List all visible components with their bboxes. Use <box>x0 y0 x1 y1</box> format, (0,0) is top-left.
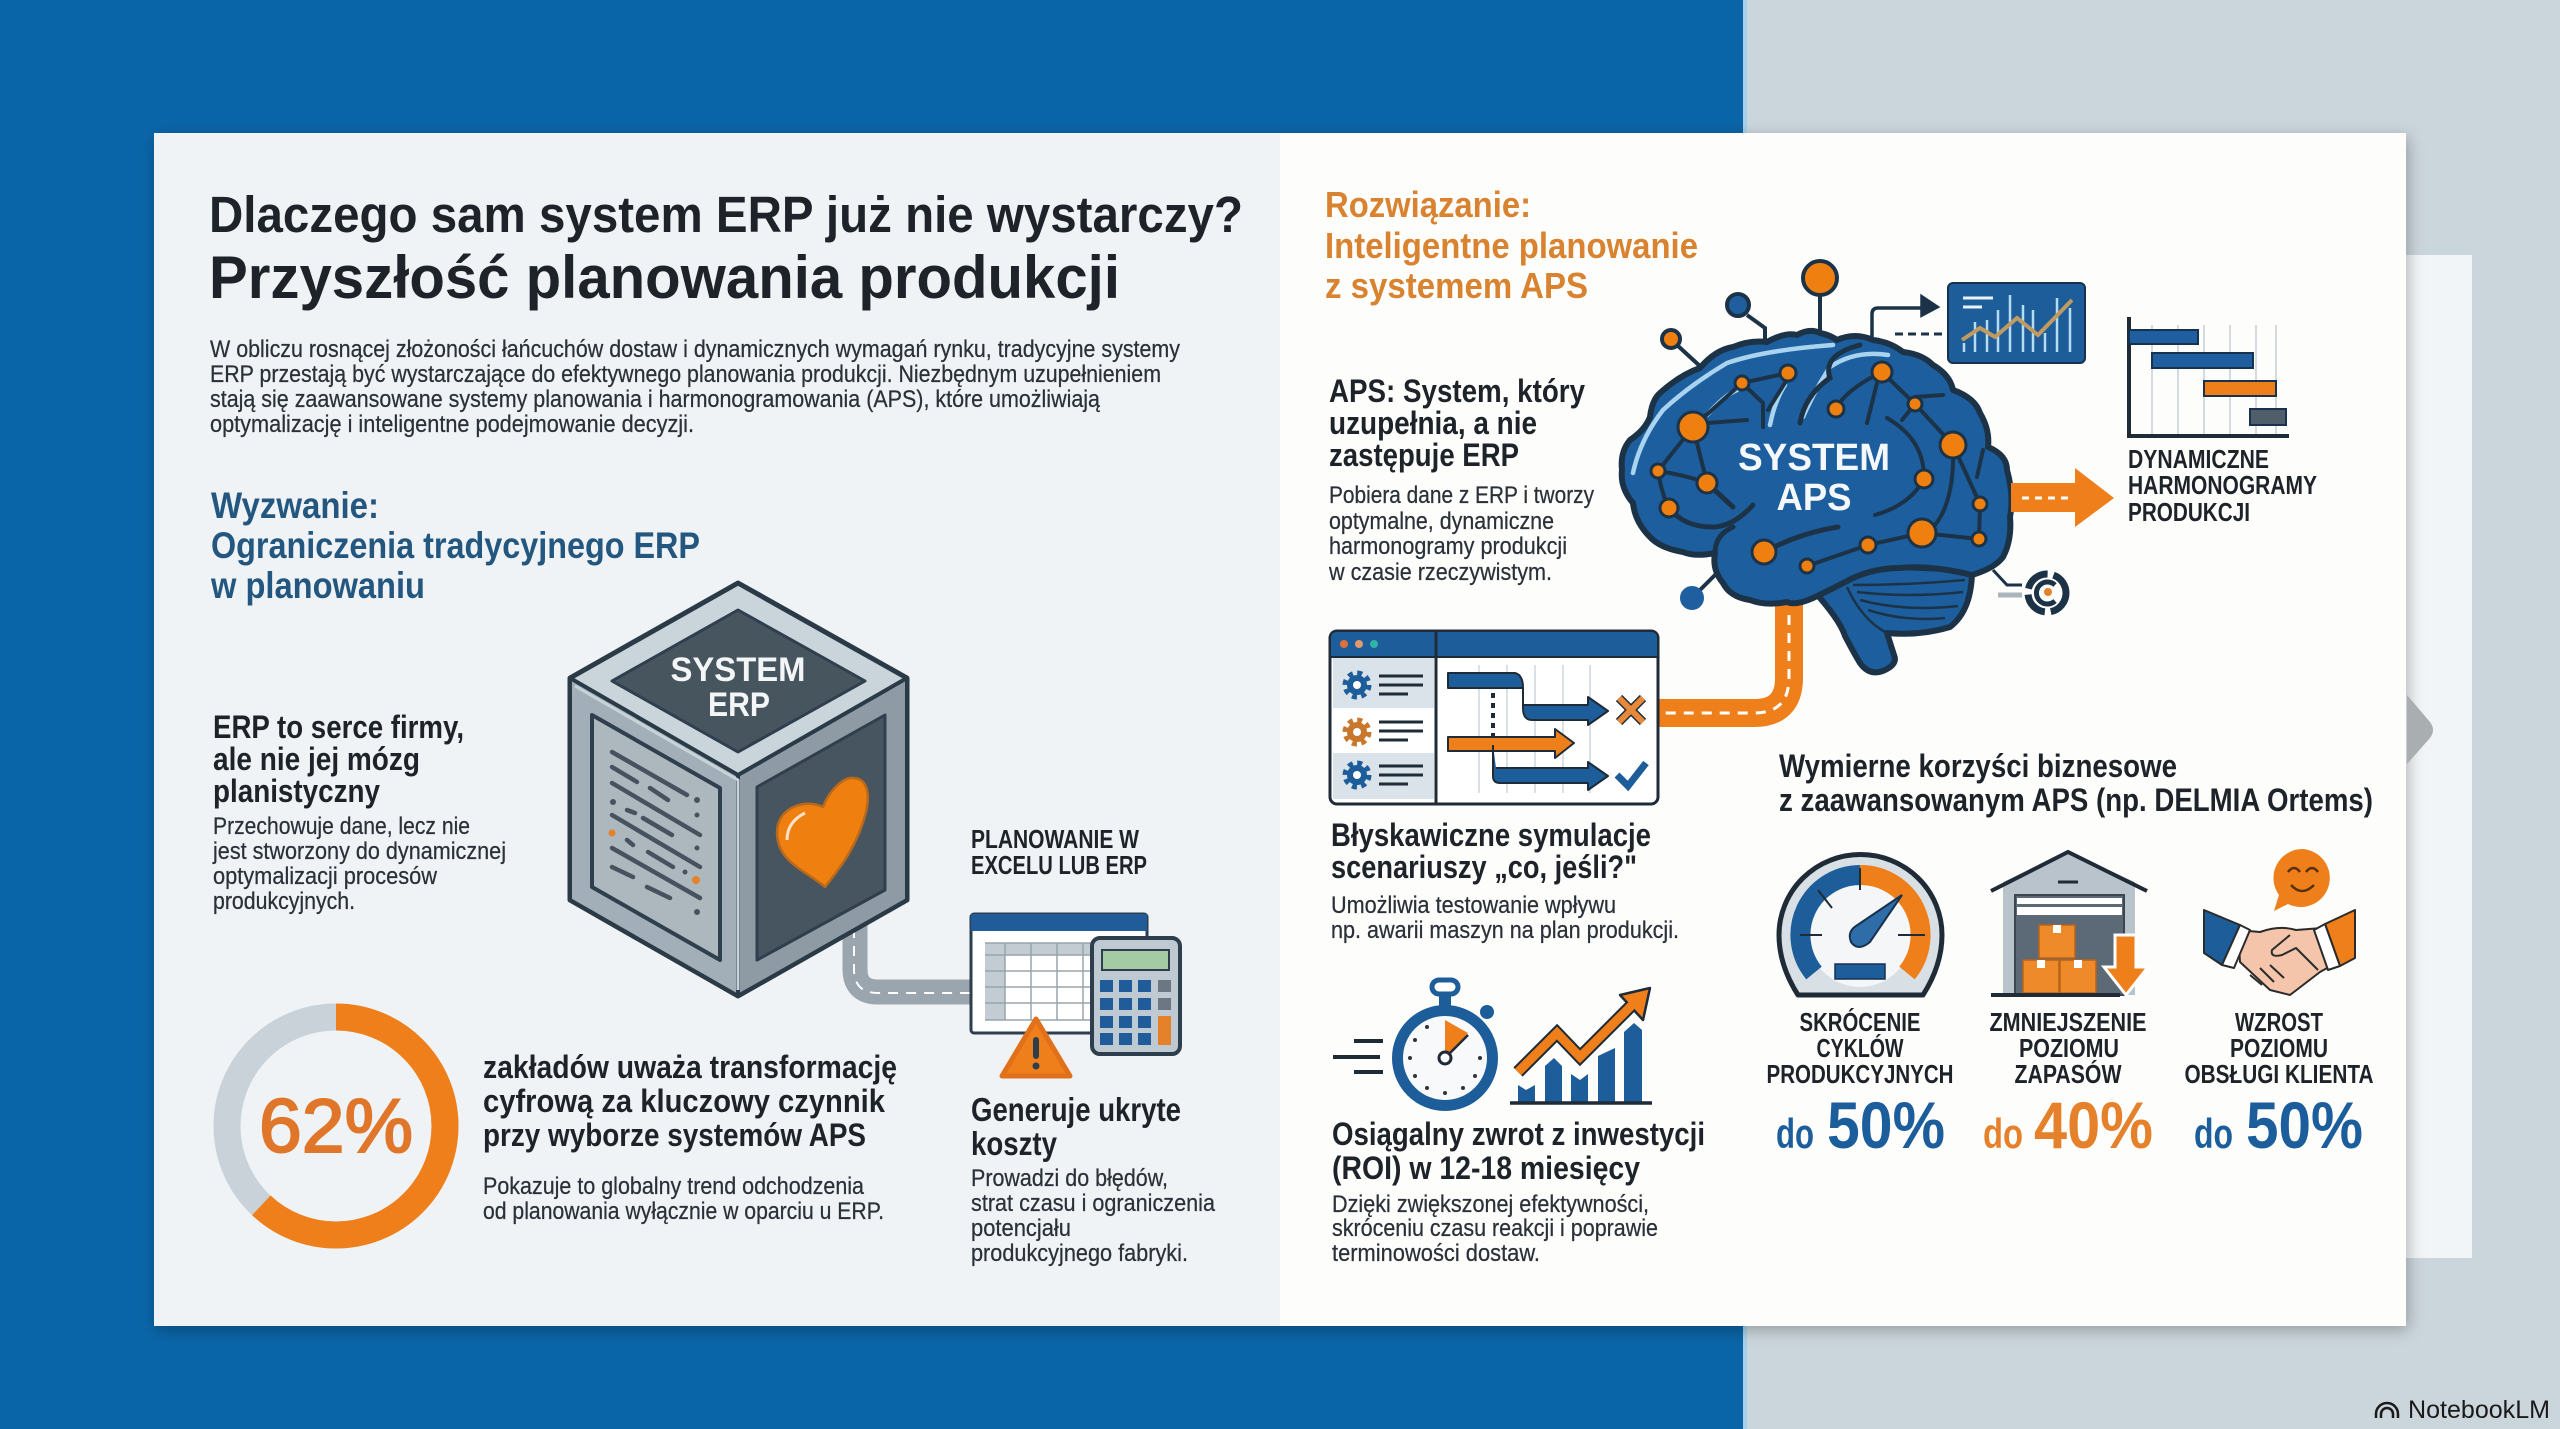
heading: korzyści <box>1779 748 2373 818</box>
heading: korzyści: Wymierne korzyści biznesowe <box>1779 748 2177 784</box>
icon: simulation window <box>1330 631 1658 804</box>
brain orange nodes <box>1651 362 1987 573</box>
text: ROI: Dzięki zwiększonej efektywności, <box>1332 1191 1649 1218</box>
label: dynamiczne harmonogramy: HARMONOGRAMY <box>2128 470 2317 500</box>
brain highlights <box>1633 345 1888 473</box>
donut chart 62%: 62% <box>259 1084 413 1169</box>
heading: Rozwiązanie: z systemem APS <box>1325 265 1588 306</box>
benefit: zapasy: do <box>1983 1110 2023 1157</box>
text: ROI: Osiągalny zwrot z inwestycji <box>1332 1116 1705 1152</box>
icon: speedometer <box>1779 855 1942 995</box>
text: symulacje: np. awarii maszyn na plan produkcji. <box>1331 917 1679 944</box>
cube label: ERP <box>708 686 770 724</box>
text: ROI: skróceniu czasu reakcji i poprawie <box>1332 1215 1658 1242</box>
icon: ERP cube <box>570 583 907 996</box>
text: zakładów statistic: od planowania wyłącznie w oparciu u ERP. <box>483 1198 884 1225</box>
page-turn arrow <box>2407 695 2433 764</box>
text: ERP to serce firmy: ERP to serce firmy, <box>213 709 464 745</box>
cube label: SYSTEM <box>670 651 806 689</box>
text: ERP to serce firmy: produkcyjnych. <box>213 888 355 915</box>
connector: orange pipe from simulation to brain <box>1655 590 1789 713</box>
intro paragraph: stają się zaawansowane systemy planowania i harmonogramowania (APS), które umożliwiają <box>210 386 1101 413</box>
benefit: skrócenie cykli: do <box>1776 1110 1814 1157</box>
icon: spreadsheet <box>971 914 1147 1033</box>
heading: korzyści: z zaawansowanym APS (np. DELMIA Ortems) <box>1779 782 2373 818</box>
benefit: obsługa klienta: do <box>2194 1110 2233 1157</box>
text: Generuje ukryte koszty: potencjału <box>971 1215 1071 1242</box>
intro paragraph: W obliczu rosnącej złożoności łańcuchów dostaw i dynamicznych wymagań rynku, tradycyjne systemy <box>210 336 1180 363</box>
benefit: zapasy: 40% <box>2034 1088 2153 1162</box>
label and value: PRODUKCYJNYCH <box>1766 1059 1954 1089</box>
NotebookLM watermark: NotebookLM <box>2408 1396 2550 1424</box>
label and value: CYKLÓW <box>1816 1033 1904 1063</box>
text: zakładów statistic: zakładów uważa transformację <box>483 1049 897 1085</box>
label: planowanie w excelu: EXCELU LUB ERP <box>971 850 1147 880</box>
text: ROI: (ROI) w 12-18 miesięcy <box>1332 1150 1640 1186</box>
intro paragraph: ERP przestają być wystarczające do efektywnego planowania produkcji. Niezbędnym uzupełnieniem <box>210 361 1161 388</box>
benefit: zapasy: ZMNIEJSZENIE <box>1990 1007 2146 1037</box>
text: ERP to serce firmy: Przechowuje dane, lecz nie <box>213 813 470 840</box>
text: zakładów statistic: Pokazuje to globalny trend odchodzenia <box>483 1173 865 1200</box>
heart <box>777 778 868 887</box>
icon: small gear target <box>1993 570 2066 612</box>
heading: Rozwiązanie: Rozwiązanie: <box>1325 184 1531 225</box>
text: Generuje ukryte koszty: strat czasu i ograniczenia <box>971 1190 1216 1217</box>
heading: Rozwiązanie: Inteligentne planowanie <box>1325 225 1698 266</box>
brain label: APS <box>1776 477 1852 519</box>
text: APS opis: w czasie rzeczywistym. <box>1328 559 1552 586</box>
benefit: obsługa klienta <box>2184 849 2374 1162</box>
brain stem and cerebellum <box>1813 565 1972 672</box>
benefit: skrócenie cykli: 50% <box>1827 1088 1945 1162</box>
text: symulacje: Błyskawiczne symulacje <box>1331 817 1651 853</box>
main card <box>154 133 2406 1326</box>
benefit: zapasy: ZAPASÓW <box>2014 1059 2122 1089</box>
text: Generuje ukryte koszty: koszty <box>971 1125 1058 1162</box>
intro paragraph: optymalizację i inteligentne podejmowanie decyzji. <box>210 411 694 438</box>
text: Generuje ukryte koszty: produkcyjnego fabryki. <box>971 1240 1188 1267</box>
icon: brain system APS <box>1622 261 2011 672</box>
text: symulacje: scenariuszy „co, jeśli?" <box>1331 849 1637 885</box>
label: dynamiczne harmonogramy: PRODUKCJI <box>2128 497 2250 527</box>
text: symulacje: Umożliwia testowanie wpływu <box>1331 892 1616 919</box>
icon: stopwatch <box>1333 980 1494 1106</box>
text: ERP to serce firmy: optymalizacji procesów <box>213 863 438 890</box>
text: zakładów statistic: przy wyborze systemów APS <box>483 1117 866 1153</box>
benefit: obsługa klienta: WZROST <box>2235 1007 2323 1037</box>
icon: handshake <box>2204 910 2355 995</box>
text: Generuje ukryte koszty <box>971 1091 1216 1267</box>
text: Generuje ukryte koszty: Prowadzi do błędów, <box>971 1165 1168 1192</box>
text: ROI: terminowości dostaw. <box>1332 1240 1540 1267</box>
heading: Wyzwanie: Ograniczenia tradycyjnego ERP <box>211 525 700 566</box>
small arrow to dashboard <box>1872 297 1942 342</box>
cube label <box>670 651 806 724</box>
text: symulacje <box>1331 817 1679 944</box>
text: Generuje ukryte koszty: Generuje ukryte <box>971 1091 1181 1128</box>
label: dynamiczne harmonogramy: DYNAMICZNE <box>2128 444 2269 474</box>
benefit: zapasy: POZIOMU <box>2019 1033 2119 1063</box>
heading: Wyzwanie <box>210 485 700 606</box>
text: APS opis: APS: System, który <box>1329 373 1585 409</box>
brain label: SYSTEM <box>1738 437 1890 479</box>
text: ERP to serce firmy: planistyczny <box>213 773 380 809</box>
label and value: SKRÓCENIE <box>1800 1007 1920 1037</box>
icon: growth chart <box>1510 988 1652 1103</box>
icon: analytics dashboard <box>1948 283 2085 363</box>
brain circuit lines <box>1658 345 1983 566</box>
benefit: obsługa klienta: 50% <box>2246 1088 2363 1162</box>
text: ERP to serce firmy: jest stworzony do dynamicznej <box>212 838 506 865</box>
text: APS opis: Pobiera dane z ERP i tworzy <box>1329 482 1594 509</box>
icon: warehouse <box>1991 852 2148 995</box>
text: APS opis: uzupełnia, a nie <box>1329 405 1537 441</box>
benefit: zapasy <box>1983 852 2153 1162</box>
text: zakładów statistic: cyfrową za kluczowy czynnik <box>483 1083 885 1119</box>
gears <box>1345 673 1369 787</box>
icon: calculator <box>1092 938 1180 1054</box>
back page behind card <box>2380 255 2472 1258</box>
brain label <box>1738 437 1890 519</box>
brain antennae and nodes <box>1662 261 1837 608</box>
benefit: skrócenie cykli <box>1766 855 1954 1162</box>
text: zakładów statistic <box>483 1049 897 1225</box>
text: APS opis <box>1328 373 1594 586</box>
brain body <box>1622 331 2011 604</box>
label: planowanie w excelu: PLANOWANIE W <box>971 824 1139 854</box>
main title: Przyszłość planowania produkcji <box>209 244 1120 311</box>
donut chart 62% <box>227 1017 445 1235</box>
main title <box>209 186 1243 311</box>
icon: Gantt chart <box>2129 317 2289 436</box>
text: ERP to serce firmy <box>212 709 506 915</box>
label: dynamiczne harmonogramy <box>2128 444 2317 527</box>
benefit: obsługa klienta: OBSŁUGI KLIENTA <box>2184 1059 2374 1089</box>
label and value <box>1766 1007 1954 1089</box>
text: APS opis: harmonogramy produkcji <box>1329 533 1567 560</box>
text: APS opis: optymalne, dynamiczne <box>1329 508 1554 535</box>
heading: Wyzwanie: w planowaniu <box>210 565 425 606</box>
icon: smiley bubble <box>2273 849 2330 911</box>
arrow: brain to harmonograms <box>2011 468 2114 527</box>
text: ERP to serce firmy: ale nie jej mózg <box>213 741 420 777</box>
label: planowanie w excelu <box>971 824 1147 880</box>
icon: warning triangle <box>1002 1019 1070 1076</box>
benefit: obsługa klienta: POZIOMU <box>2230 1033 2328 1063</box>
text: APS opis: zastępuje ERP <box>1329 437 1519 473</box>
main title: Dlaczego sam system ERP już nie wystarczy? <box>209 186 1243 243</box>
text: ROI <box>1332 1116 1705 1267</box>
heading: Wyzwanie: Wyzwanie: <box>211 485 379 526</box>
heading: Rozwiązanie <box>1325 184 1698 306</box>
connector road from ERP cube <box>854 905 975 993</box>
intro paragraph <box>210 336 1180 438</box>
